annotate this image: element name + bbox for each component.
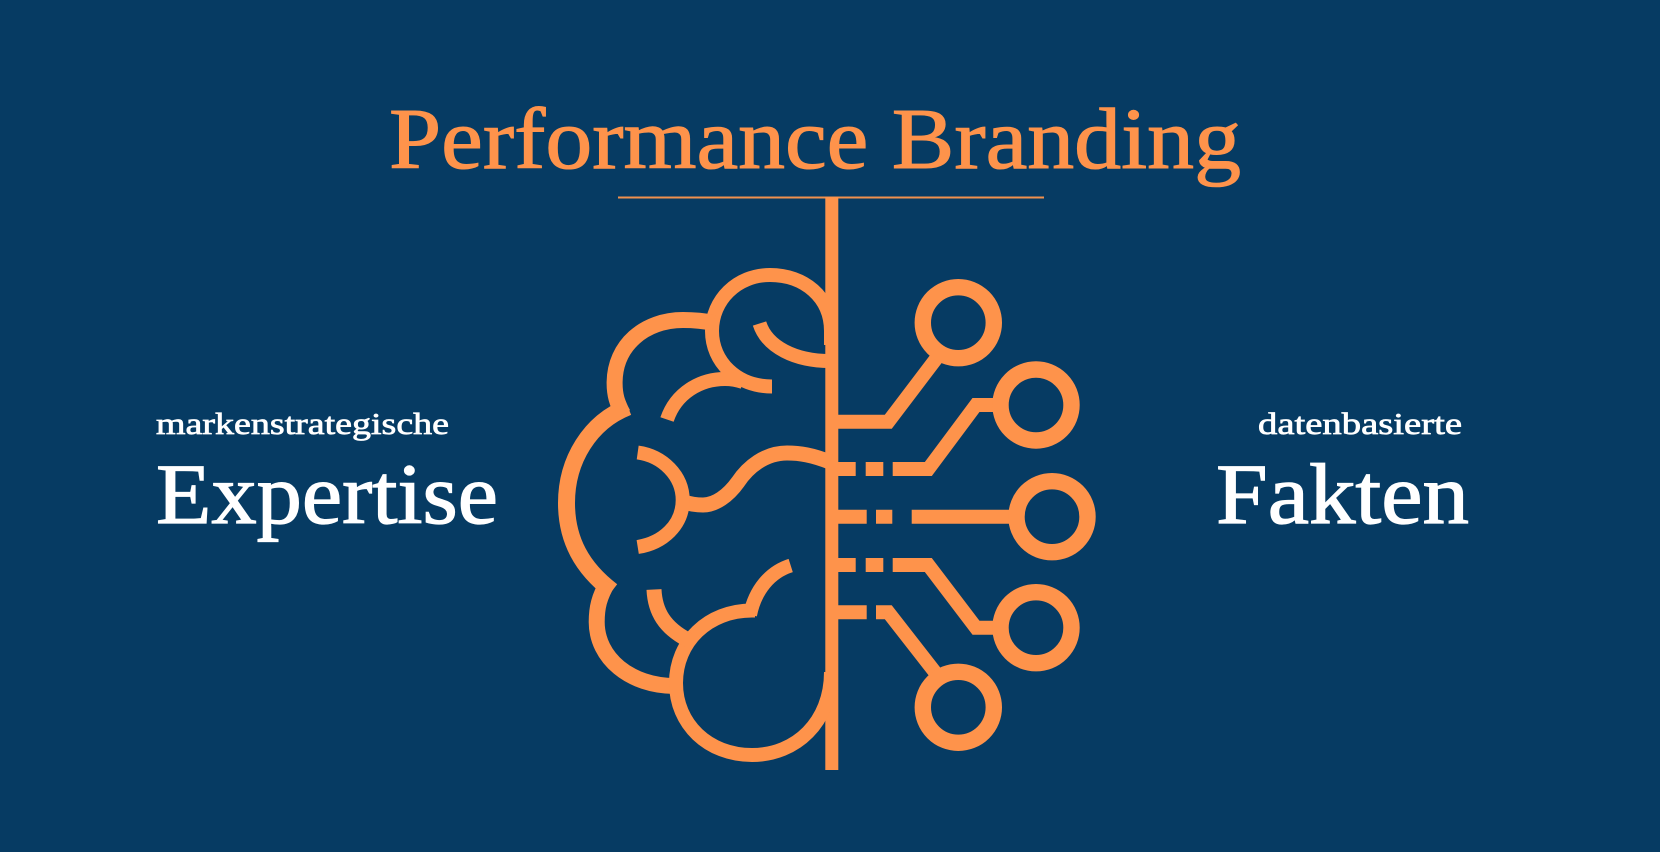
lower left lobe (597, 582, 675, 686)
circuit trace 1 (838, 347, 945, 422)
circuit trace 2 (838, 405, 1000, 469)
upper inner arc (667, 379, 743, 420)
lower inner arc (654, 590, 688, 640)
circuit trace 5 (838, 612, 945, 685)
icon: brain and circuit (566, 197, 1088, 770)
middle bracket arc (638, 452, 683, 547)
brain: left hemisphere (566, 275, 831, 755)
circuit trace 4 (838, 565, 1000, 628)
circuit node 3 (1016, 481, 1088, 552)
left large label: Expertise (156, 446, 498, 542)
bottom lobe (676, 610, 831, 755)
bottom lobe curl (750, 566, 791, 615)
title: Performance Branding (389, 90, 1241, 187)
right small label: datenbasierte (1258, 406, 1462, 441)
right large label: Fakten (1216, 446, 1469, 542)
circuit node 1 (923, 287, 994, 358)
circuit: right hemisphere (838, 287, 1088, 743)
title underline (618, 196, 1044, 198)
top lobe hook (760, 324, 830, 361)
top lobe (712, 275, 831, 386)
left outer lobe (566, 407, 628, 591)
left label: markenstrategische Expertise (156, 406, 498, 542)
circuit node 5 (923, 672, 994, 743)
middle connector (684, 453, 830, 505)
upper left lobe (615, 320, 714, 414)
circuit trace 3 (838, 510, 1015, 524)
left small label: markenstrategische (156, 406, 449, 441)
circuit node 2 (1000, 370, 1072, 440)
circuit node 4 (1000, 592, 1072, 663)
central vertical bar (825, 197, 838, 770)
right label: datenbasierte Fakten (1216, 406, 1469, 542)
